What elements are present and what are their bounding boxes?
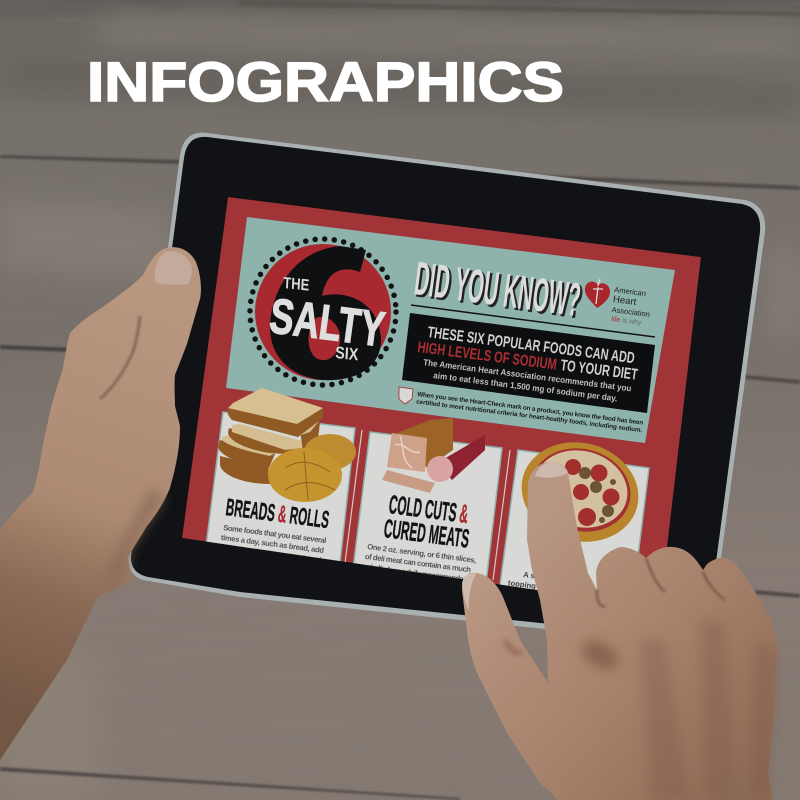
card body fragment: A s — [523, 570, 535, 580]
card heading: COLD CUTS & — [387, 489, 470, 529]
big numeral 6 — [270, 246, 381, 380]
card heading: BREADS & ROLLS — [224, 494, 331, 534]
illustration: ham and salami — [382, 418, 485, 493]
heart-check note: certified to meet nutritional criteria for heart-healthy foods, including sodium. — [416, 399, 643, 434]
divider lines between cards — [345, 430, 510, 580]
card: pizza — [499, 442, 650, 590]
crease at thumb web — [100, 316, 140, 399]
card body: One 2 oz. serving, or 6 thin slices, — [367, 542, 477, 565]
screen contents — [182, 197, 701, 620]
index fingernail — [535, 462, 568, 478]
card body fragment: topping — [507, 578, 537, 591]
left hand — [0, 247, 201, 760]
tablet — [128, 133, 765, 644]
logo text the: THE — [283, 274, 310, 295]
teal header panel — [226, 217, 675, 443]
tagline: life is why — [611, 316, 642, 327]
card background — [499, 449, 650, 590]
callout text: aim to eat less than 1,500 mg of sodium per day. — [433, 370, 618, 403]
red circle — [255, 244, 391, 380]
card body: times a day, such as bread, add — [220, 533, 325, 555]
tablet black front — [131, 137, 760, 638]
card body: of deli meat can contain as much — [364, 552, 472, 574]
icon: heart — [585, 281, 610, 308]
card: breads and rolls — [206, 388, 356, 562]
heading: did you know — [414, 262, 582, 318]
card body: Some foods that you eat several — [223, 523, 327, 545]
logo text six: SIX — [335, 343, 359, 364]
knuckle and vein shadows — [577, 620, 778, 800]
callout text — [416, 324, 639, 403]
card: cold cuts and cured meats: CURED MEATS — [382, 513, 471, 554]
callout text: The American Heart Association recommends that you — [423, 357, 632, 393]
organisation name: Heart — [612, 294, 637, 308]
card body: as half of your daily recommended — [361, 562, 469, 584]
illustration: bread slices — [218, 388, 323, 484]
card body: up to a lot of sodium even though — [218, 543, 325, 565]
thumb nail — [155, 251, 192, 285]
logo: the salty six — [250, 239, 396, 385]
illustration: rolls — [268, 434, 356, 502]
thumb nail — [462, 573, 476, 610]
callout text: THESE SIX POPULAR FOODS CAN ADD — [426, 324, 636, 367]
red infographic page — [182, 197, 701, 608]
card background — [353, 431, 503, 580]
card: cold cuts and cured meats — [353, 418, 503, 580]
hand body — [462, 462, 778, 800]
finger gap shadows — [597, 558, 725, 606]
organisation name: American — [614, 285, 647, 298]
card background — [206, 411, 356, 562]
callout text: TO YOUR DIET — [559, 357, 639, 384]
dotted ring — [250, 239, 396, 385]
hand and forearm — [0, 247, 201, 760]
divider rule — [411, 305, 655, 337]
american heart association logo — [585, 279, 653, 327]
tablet silver bezel — [128, 133, 765, 644]
title: INFOGRAPHICS — [87, 50, 564, 113]
heart-check note: When you see the Heart-Check mark on a product, you know the food has been — [417, 391, 644, 427]
screen contents: DID YOU KNOW? — [414, 254, 586, 329]
heart-check mark icon — [399, 387, 413, 404]
organisation name: Association — [611, 305, 651, 319]
illustration: pizza — [522, 442, 638, 542]
right hand — [462, 462, 778, 800]
screen contents: DID YOU KNOW? — [412, 252, 584, 327]
logo text salty: SALTY — [267, 288, 388, 357]
shadow on palm edge — [100, 490, 165, 590]
callout text: HIGH LEVELS OF SODIUM — [416, 339, 558, 374]
black callout banner — [402, 313, 655, 413]
